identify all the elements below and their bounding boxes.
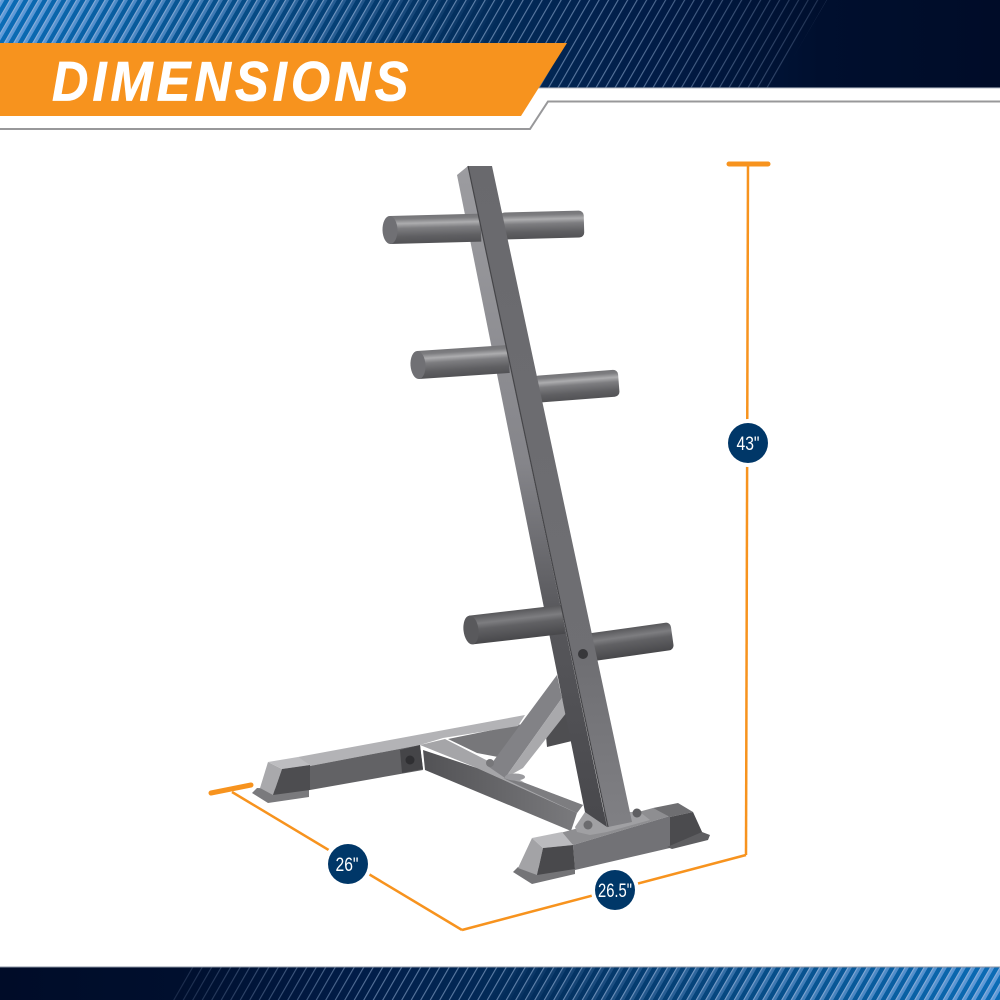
width dimension: 26.5" — [598, 881, 632, 902]
rack base inner face — [448, 723, 530, 757]
header outline stroke — [0, 102, 1000, 129]
peg left top — [382, 214, 481, 244]
rack base back foot — [545, 712, 572, 747]
height dimension — [724, 164, 772, 855]
rack front foot bar — [560, 808, 670, 870]
rack mount plate — [575, 808, 650, 835]
header band — [0, 0, 1000, 88]
title banner — [0, 43, 567, 116]
rack base long bar — [298, 715, 525, 790]
peg right top — [500, 210, 584, 240]
rack left foot — [252, 757, 310, 803]
weight plate rack — [252, 166, 710, 884]
mast side face — [457, 166, 607, 827]
width dimension — [462, 855, 746, 930]
rack front left foot — [513, 832, 575, 884]
depth dimension: 26" — [336, 855, 358, 876]
peg left bottom — [462, 605, 565, 645]
peg right bottom — [585, 622, 674, 662]
title: DIMENSIONS — [52, 51, 408, 113]
rack diagonal brace — [486, 675, 567, 780]
peg left middle — [410, 345, 510, 379]
depth dimension — [211, 785, 462, 930]
mast front face — [468, 166, 632, 827]
rack right foot — [653, 803, 710, 849]
mast bolt — [578, 649, 588, 659]
rack base stem — [420, 739, 583, 831]
footer band — [0, 966, 1000, 1000]
height dimension: 43" — [736, 434, 760, 455]
peg right middle — [533, 369, 620, 403]
